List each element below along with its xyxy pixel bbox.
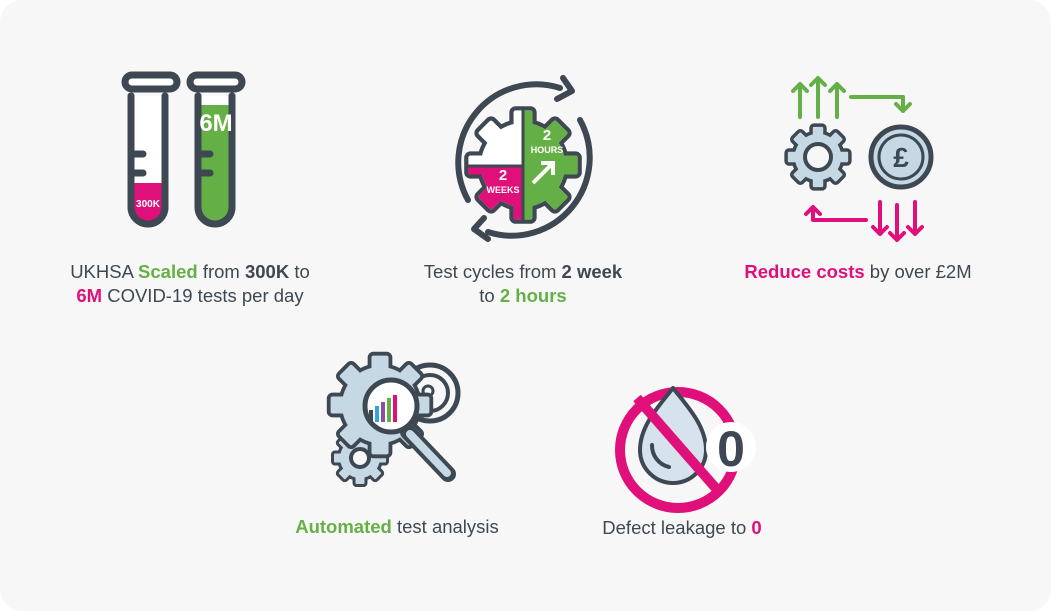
icon: costs: £	[893, 142, 909, 173]
text: tests scaled: UKHSA Scaled from 300K to	[70, 261, 310, 282]
icon: automated analysis	[331, 356, 458, 484]
tube 300K: 300K	[136, 199, 161, 210]
text: reduce costs: Reduce costs by over £2M	[744, 261, 972, 282]
text: defect leakage: Defect leakage to 0	[602, 517, 762, 538]
text: tests scaled: 6M COVID-19 tests per day	[76, 285, 304, 306]
text: test cycles	[424, 261, 622, 306]
text: automated: Automated test analysis	[295, 516, 499, 537]
icon: test cycle gear: 2	[499, 167, 507, 184]
icon: test tubes	[125, 75, 242, 224]
icon: test cycle gear: 2	[543, 127, 551, 144]
icon: no leakage	[620, 388, 756, 508]
icon: test cycle gear	[458, 78, 590, 239]
text: tests scaled	[70, 261, 310, 306]
text: test cycles: to 2 hours	[479, 285, 567, 306]
text: test cycles: Test cycles from 2 week	[424, 261, 622, 282]
icon: no leakage: 0	[717, 421, 745, 477]
icon: test cycle gear: WEEKS	[486, 185, 520, 195]
tube 6M: 6M	[199, 110, 233, 137]
icon: costs	[788, 78, 931, 240]
tube 6M	[190, 75, 242, 224]
icon: test cycle gear: HOURS	[531, 145, 563, 155]
tube 300K	[125, 75, 177, 224]
